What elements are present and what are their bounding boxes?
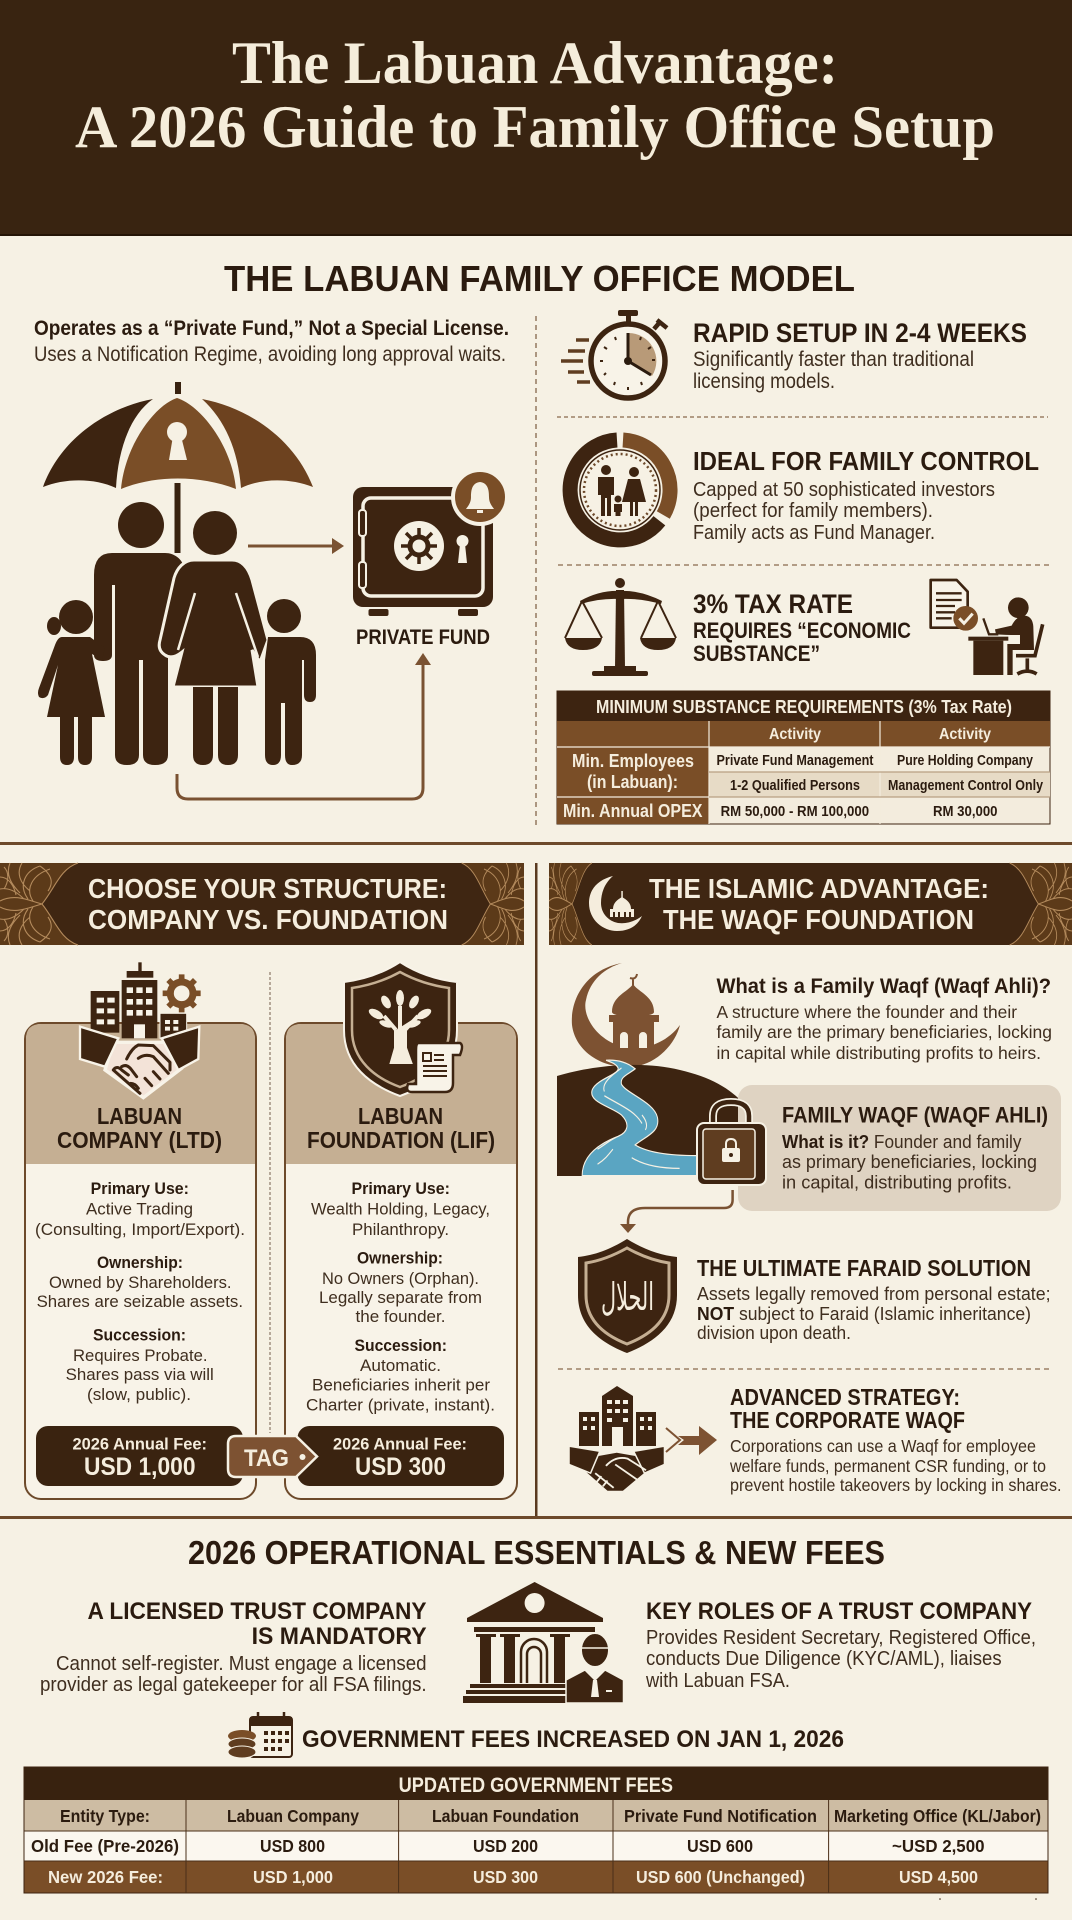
arrow: family to private fund (177, 653, 431, 799)
table: updated government fees (24, 1767, 1048, 1893)
table: updated government fees: Private Fund Notification (624, 1806, 817, 1826)
rapid setup text: RAPID SETUP IN 2-4 WEEKS (693, 318, 1027, 348)
panel: labuan foundation card: LABUAN (358, 1103, 443, 1129)
table: minimum substance requirements: Activity (769, 726, 821, 743)
title banner: A 2026 Guide to Family Office Setup (75, 94, 995, 160)
arrow: waqf to faraid shield (620, 1190, 733, 1233)
faraid solution text: Assets legally removed from personal estate; (697, 1284, 1050, 1304)
family control text (693, 446, 1039, 544)
company fee box: USD 1,000 (84, 1453, 196, 1481)
family control text: Family acts as Fund Manager. (693, 522, 935, 544)
label: private fund: PRIVATE FUND (356, 626, 490, 649)
table: updated government fees: USD 600 (687, 1836, 753, 1856)
company details text: Owned by Shareholders. (49, 1273, 232, 1292)
company details text: Primary Use: (91, 1179, 189, 1198)
table: minimum substance requirements: 1-2 Qualified Persons (730, 778, 860, 794)
icon: crescent, mosque, hill and river (557, 963, 745, 1176)
icon: safe with bell (353, 470, 507, 616)
icon: shield with tree and scroll (344, 962, 462, 1096)
key roles text: with Labuan FSA. (645, 1670, 790, 1692)
foundation details text: Wealth Holding, Legacy, (311, 1200, 490, 1218)
foundation details text: Succession: (354, 1336, 447, 1355)
key roles text: Provides Resident Secretary, Registered Office, (646, 1627, 1036, 1649)
table: updated government fees: Old Fee (Pre-2026) (31, 1836, 179, 1856)
panel: labuan company card (25, 962, 256, 1499)
table: updated government fees: Labuan Foundation (432, 1806, 579, 1826)
foundation details text: Primary Use: (352, 1179, 450, 1198)
table: minimum substance requirements: Management Control Only (888, 778, 1043, 794)
tag label: TAG (244, 1445, 289, 1472)
table: minimum substance requirements (557, 691, 1050, 824)
private fund intro text: Operates as a “Private Fund,” Not a Special License. (34, 317, 509, 340)
panel: labuan foundation card (285, 962, 517, 1499)
table: updated government fees: Labuan Company (227, 1806, 359, 1826)
private fund intro text (34, 317, 509, 366)
table: updated government fees: New 2026 Fee: (48, 1867, 163, 1887)
company fee box (36, 1426, 243, 1486)
table: updated government fees: Marketing Office (KL/Jabor) (834, 1806, 1041, 1826)
what is family waqf text: in capital while distributing profits to heirs. (716, 1043, 1041, 1063)
table: minimum substance requirements: Min. Employees (572, 750, 694, 771)
corporate waqf text: THE CORPORATE WAQF (730, 1407, 965, 1433)
foundation fee box: 2026 Annual Fee: (333, 1435, 467, 1454)
what is family waqf text: A structure where the founder and their (716, 1002, 1017, 1022)
girl (38, 600, 105, 765)
table: minimum substance requirements: Activity (939, 726, 991, 743)
table: minimum substance requirements: Private Fund Management (716, 753, 874, 769)
foundation details text: Ownership: (357, 1249, 443, 1268)
key roles text: KEY ROLES OF A TRUST COMPANY (646, 1598, 1032, 1625)
corporate waqf text: welfare funds, permanent CSR funding, or to (729, 1456, 1046, 1476)
title banner: The Labuan Advantage: (232, 30, 838, 96)
company details text: Ownership: (97, 1253, 183, 1272)
faraid solution text: division upon death. (697, 1323, 851, 1343)
foundation fee box: USD 300 (355, 1453, 446, 1481)
icon: stopwatch (561, 310, 667, 398)
table: updated government fees: USD 300 (473, 1867, 538, 1887)
heading: family office model: THE LABUAN FAMILY OFFICE MODEL (224, 258, 855, 299)
table: updated government fees: USD 1,000 (253, 1867, 333, 1887)
icon: family group (38, 502, 316, 765)
title banner (0, 0, 1072, 236)
mother (159, 511, 268, 765)
table: updated government fees: Entity Type: (60, 1806, 150, 1826)
icon: shield with calligraphy: الحلال (601, 1275, 654, 1319)
foundation fee box (298, 1426, 504, 1486)
arrow: family to safe (248, 538, 344, 554)
banner: choose your structure: COMPANY VS. FOUNDATION (88, 904, 448, 935)
arrow: chevron to corporate waqf (666, 1426, 717, 1455)
faraid solution text: NOT subject to Faraid (Islamic inheritance) (697, 1304, 1031, 1324)
tax rate text (693, 589, 911, 666)
company details text: Requires Probate. (73, 1346, 208, 1365)
table: minimum substance requirements: Pure Holding Company (897, 753, 1033, 769)
banner: the islamic advantage (549, 863, 1072, 945)
table: minimum substance requirements: Min. Annual OPEX (563, 800, 703, 821)
boy (265, 599, 316, 765)
tax rate text: SUBSTANCE” (693, 641, 820, 666)
tax rate text: 3% TAX RATE (693, 589, 853, 619)
foundation details text: Automatic. (360, 1356, 441, 1375)
icon: crescent and mosque (589, 876, 642, 931)
icon: scales (565, 578, 676, 676)
faraid solution text (697, 1255, 1050, 1343)
callout: family waqf: as primary beneficiaries, locking (782, 1152, 1037, 1172)
family control text: Capped at 50 sophisticated investors (693, 479, 995, 501)
table: minimum substance requirements: MINIMUM SUBSTANCE REQUIREMENTS (3% Tax Rate) (596, 696, 1012, 717)
company details text: Shares pass via will (66, 1365, 214, 1384)
licensed trust company text: Cannot self-register. Must engage a licensed (56, 1653, 427, 1675)
icon: corporate buildings and handshake (569, 1386, 664, 1491)
table: minimum substance requirements: RM 50,000 - RM 100,000 (721, 804, 869, 820)
company details text (35, 1179, 245, 1404)
icon: buildings and handshake (80, 962, 201, 1098)
banner: the islamic advantage: THE ISLAMIC ADVANTAGE: (649, 873, 989, 904)
foundation details text: Legally separate from (319, 1288, 482, 1307)
heading: operational essentials: 2026 OPERATIONAL ESSENTIALS & NEW FEES (188, 1534, 885, 1571)
table: updated government fees: USD 600 (Unchanged) (636, 1867, 805, 1887)
what is family waqf text (716, 975, 1052, 1063)
private fund intro text: Uses a Notification Regime, avoiding long approval waits. (34, 343, 506, 366)
banner: choose your structure (0, 863, 524, 945)
panel: labuan company card: COMPANY (LTD) (57, 1127, 222, 1153)
icon: bank and professional (463, 1582, 624, 1703)
heading: government fees increased: GOVERNMENT FEES INCREASED ON JAN 1, 2026 (302, 1726, 844, 1753)
faraid solution text: THE ULTIMATE FARAID SOLUTION (697, 1255, 1031, 1281)
what is family waqf text: What is a Family Waqf (Waqf Ahli)? (716, 975, 1051, 998)
table: updated government fees: USD 4,500 (899, 1867, 978, 1887)
table: updated government fees: UPDATED GOVERNMENT FEES (399, 1774, 673, 1797)
table: updated government fees: USD 800 (260, 1836, 325, 1856)
foundation details text: the founder. (356, 1307, 446, 1326)
callout: family waqf: FAMILY WAQF (WAQF AHLI) (782, 1103, 1048, 1128)
family control text: (perfect for family members). (693, 500, 933, 522)
table: minimum substance requirements: RM 30,000 (933, 804, 998, 820)
corporate waqf text: Corporations can use a Waqf for employee (730, 1436, 1036, 1456)
icon: document and worker at desk (931, 580, 1043, 675)
banner: the islamic advantage: THE WAQF FOUNDATION (663, 904, 974, 935)
callout: family waqf: What is it? Founder and family (782, 1132, 1022, 1152)
corporate waqf text (729, 1384, 1062, 1495)
table: minimum substance requirements: (in Labuan): (587, 771, 678, 792)
banner: choose your structure: CHOOSE YOUR STRUCTURE: (88, 873, 447, 904)
rapid setup text (693, 318, 1027, 393)
company details text: Shares are seizable assets. (37, 1292, 243, 1311)
icon: shield with calligraphy (578, 1239, 677, 1353)
foundation details text: Beneficiaries inherit per (312, 1376, 490, 1395)
foundation details text: Philanthropy. (352, 1220, 449, 1239)
key roles text: conducts Due Diligence (KYC/AML), liaises (646, 1648, 1002, 1670)
tax rate text: REQUIRES “ECONOMIC (693, 618, 911, 643)
what is family waqf text: family are the primary beneficiaries, locking (716, 1022, 1052, 1042)
corporate waqf text: ADVANCED STRATEGY: (730, 1384, 960, 1410)
licensed trust company text (40, 1598, 427, 1696)
company details text: (slow, public). (87, 1385, 191, 1404)
family control text: IDEAL FOR FAMILY CONTROL (693, 446, 1039, 476)
callout: family waqf: in capital, distributing profits. (782, 1172, 1012, 1192)
panel: labuan company card: LABUAN (97, 1103, 182, 1129)
foundation details text: Charter (private, instant). (306, 1396, 495, 1415)
foundation details text (306, 1179, 495, 1415)
company details text: Succession: (93, 1326, 186, 1345)
rapid setup text: Significantly faster than traditional (693, 348, 974, 371)
licensed trust company text: A LICENSED TRUST COMPANY (88, 1598, 426, 1625)
icon: umbrella with keyhole (43, 382, 313, 553)
table: updated government fees: ~USD 2,500 (892, 1836, 985, 1856)
panel: labuan foundation card: FOUNDATION (LIF) (307, 1127, 495, 1153)
tag label (228, 1436, 317, 1477)
table: updated government fees: USD 200 (473, 1836, 538, 1856)
callout: family waqf (738, 1085, 1061, 1211)
company details text: (Consulting, Import/Export). (35, 1220, 245, 1239)
icon: family control ring (570, 440, 670, 540)
licensed trust company text: provider as legal gatekeeper for all FSA filings. (40, 1674, 427, 1696)
rapid setup text: licensing models. (693, 370, 835, 393)
company fee box: 2026 Annual Fee: (72, 1435, 207, 1454)
father (94, 502, 183, 765)
key roles text (645, 1598, 1036, 1692)
foundation details text: No Owners (Orphan). (322, 1269, 479, 1288)
icon: calendar and coins (228, 1712, 292, 1758)
company details text: Active Trading (86, 1200, 193, 1218)
licensed trust company text: IS MANDATORY (252, 1623, 427, 1650)
icon: padlock safe (697, 1102, 766, 1185)
